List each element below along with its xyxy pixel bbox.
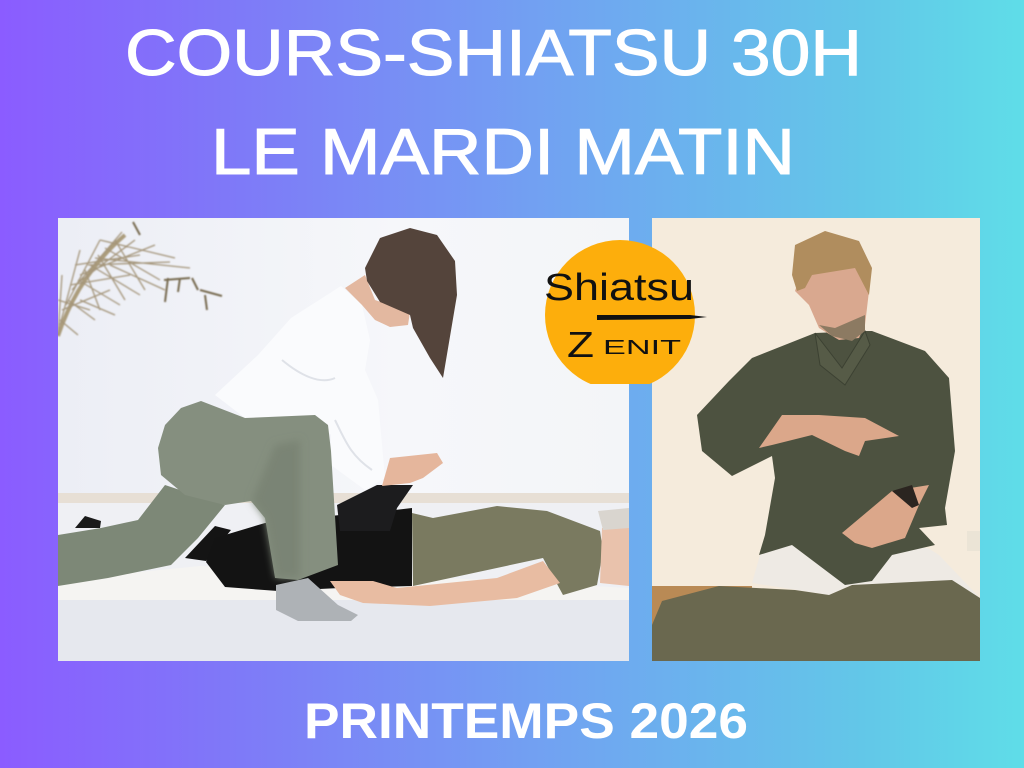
photo: instructor bbox=[652, 218, 981, 661]
photo: shiatsu treatment bbox=[58, 218, 629, 661]
therapist bbox=[58, 228, 457, 621]
lower hand and watch bbox=[842, 485, 929, 548]
logo: Shiatsu Zenit: ENIT bbox=[603, 337, 681, 359]
floor mat bbox=[58, 566, 629, 600]
logo: Shiatsu Zenit bbox=[544, 240, 707, 390]
cushion bbox=[652, 580, 980, 661]
footer: season: PRINTEMPS 2026 bbox=[304, 693, 748, 749]
head bbox=[792, 231, 872, 341]
logo: Shiatsu Zenit: Z bbox=[567, 324, 594, 365]
pointing arm bbox=[759, 415, 899, 456]
instructor jacket bbox=[697, 331, 955, 585]
title line 2: LE MARDI MATIN bbox=[211, 115, 795, 188]
patient lying bbox=[185, 485, 629, 606]
dried plant bbox=[58, 222, 222, 336]
logo: Shiatsu Zenit: Shiatsu bbox=[544, 267, 694, 309]
wall socket bbox=[967, 531, 981, 551]
title line 1: COURS-SHIATSU 30H bbox=[125, 16, 862, 89]
white trousers bbox=[752, 545, 980, 598]
jacket collar bbox=[815, 331, 870, 385]
